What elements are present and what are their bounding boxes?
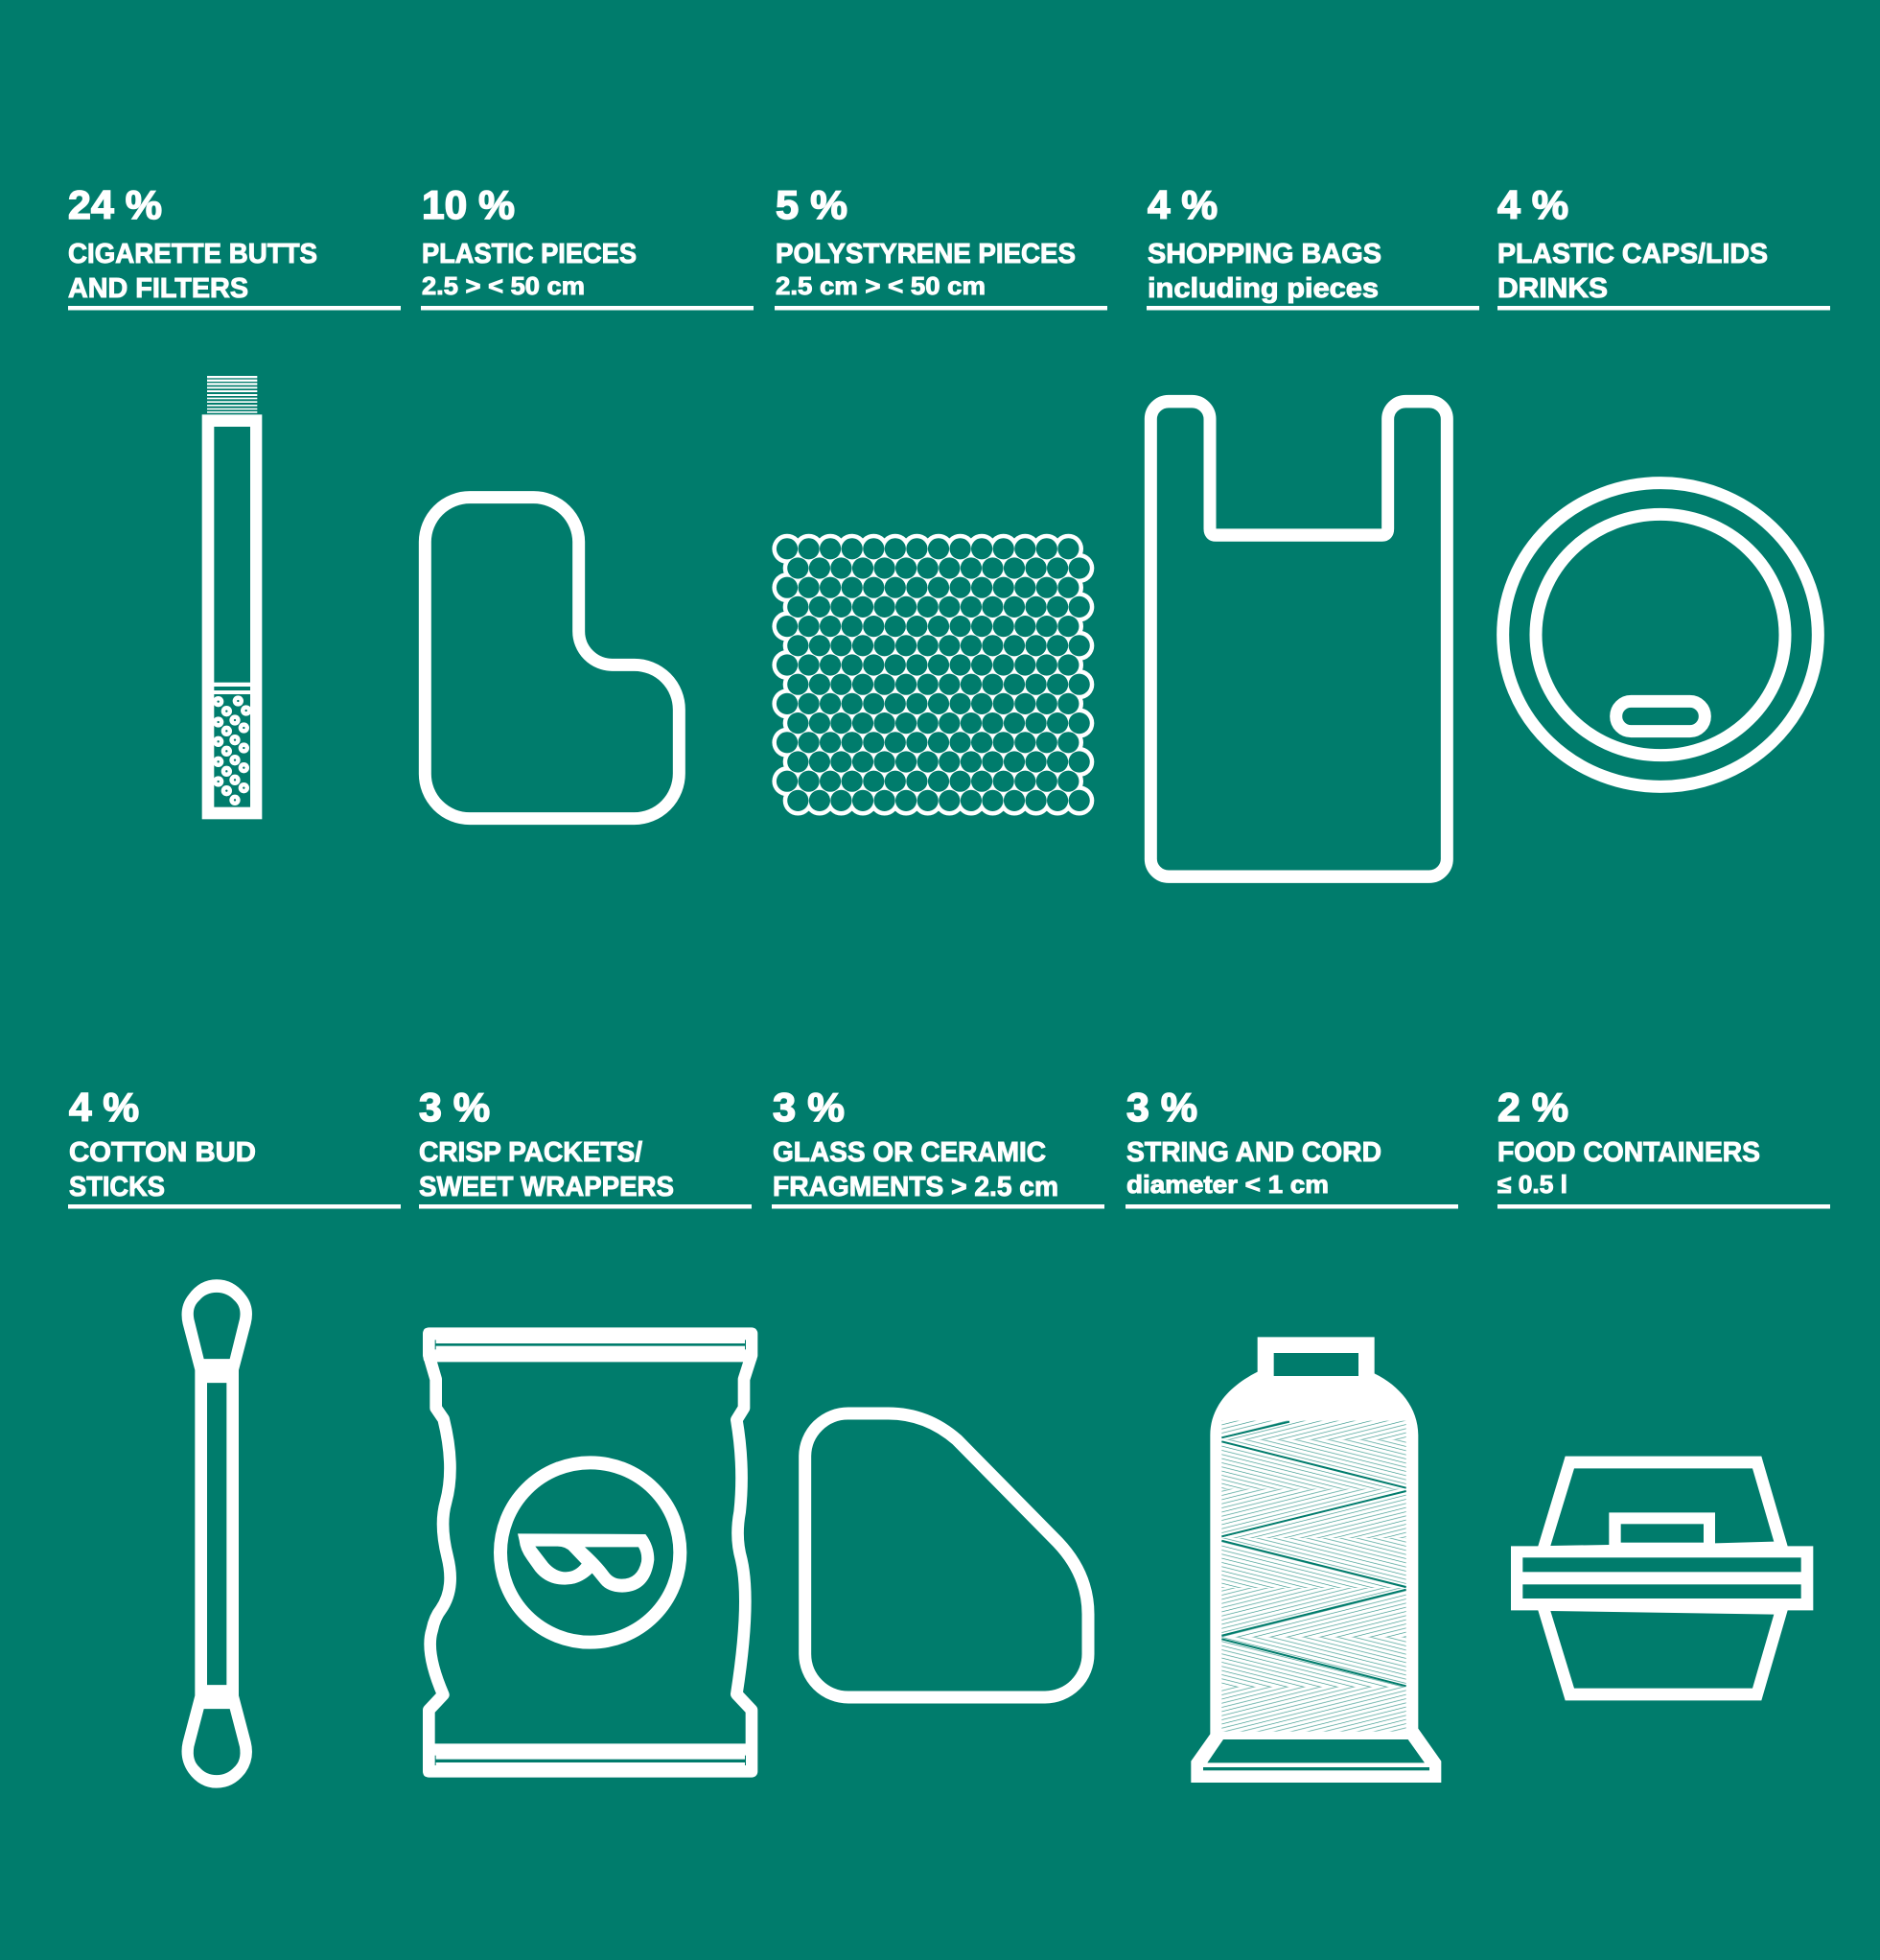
label line 1: FOOD CONTAINERS: [1497, 1137, 1760, 1168]
thread zigzag: [1221, 1422, 1406, 1686]
heading: polystyrene pieces: [775, 182, 1107, 311]
volume: ≤ 0.5 l: [1497, 1170, 1567, 1199]
icon: cotton bud: [182, 1279, 252, 1788]
heading: food containers: [1497, 1085, 1830, 1208]
size range: 2.5 > < 50 cm: [422, 271, 585, 300]
label line 2: DRINKS: [1497, 273, 1608, 304]
logo circle: [500, 1462, 680, 1643]
icon: crisp packet: [424, 1328, 756, 1777]
percentage: 5 %: [776, 182, 847, 227]
diameter: diameter < 1 cm: [1126, 1170, 1329, 1199]
label line 1: CIGARETTE BUTTS: [68, 239, 317, 269]
icon: polystyrene piece: [772, 534, 1094, 816]
label line 1: COTTON BUD: [69, 1137, 256, 1168]
label line 1: STRING AND CORD: [1126, 1137, 1381, 1168]
label line 2: FRAGMENTS > 2.5 cm: [773, 1172, 1058, 1202]
percentage: 4 %: [69, 1085, 139, 1130]
percentage: 24 %: [68, 182, 162, 227]
label line 1: CRISP PACKETS/: [419, 1137, 642, 1168]
heading: shopping bags: [1147, 182, 1479, 311]
thread hatching: [1221, 1421, 1406, 1732]
percentage: 4 %: [1148, 182, 1218, 227]
icon: food container: [1511, 1457, 1813, 1700]
icon: plastic piece: [425, 498, 679, 819]
heading: cotton bud sticks: [68, 1085, 401, 1208]
heading: crisp packets: [419, 1085, 752, 1208]
percentage: 4 %: [1497, 182, 1568, 227]
heading: glass or ceramic: [772, 1085, 1104, 1208]
icon: shopping bag: [1150, 402, 1447, 876]
heading: plastic pieces: [421, 182, 754, 311]
icon: cigarette: [202, 376, 262, 819]
percentage: 2 %: [1497, 1085, 1568, 1130]
label line 1: PLASTIC CAPS/LIDS: [1497, 239, 1768, 269]
icon: broken glass fragment: [805, 1413, 1088, 1697]
label line 1: GLASS OR CERAMIC: [773, 1137, 1046, 1168]
label line 2: STICKS: [69, 1172, 165, 1202]
heading: plastic caps and lids: [1497, 182, 1830, 311]
label line 2: SWEET WRAPPERS: [419, 1172, 674, 1202]
label line 1: PLASTIC PIECES: [422, 239, 637, 269]
percentage: 10 %: [422, 182, 515, 227]
heading: cigarette butts: [68, 182, 401, 311]
label line 1: POLYSTYRENE PIECES: [776, 239, 1076, 269]
label line 2: including pieces: [1148, 273, 1379, 304]
label line 2: AND FILTERS: [68, 273, 248, 304]
icon: spool of string: [1191, 1337, 1441, 1783]
icon: drink lid: [1503, 483, 1818, 786]
heading: string and cord: [1126, 1085, 1458, 1208]
percentage: 3 %: [1126, 1085, 1197, 1130]
percentage: 3 %: [419, 1085, 490, 1130]
size range: 2.5 cm > < 50 cm: [776, 271, 986, 300]
label line 1: SHOPPING BAGS: [1148, 239, 1381, 269]
logo mark: [518, 1533, 654, 1593]
percentage: 3 %: [773, 1085, 845, 1130]
